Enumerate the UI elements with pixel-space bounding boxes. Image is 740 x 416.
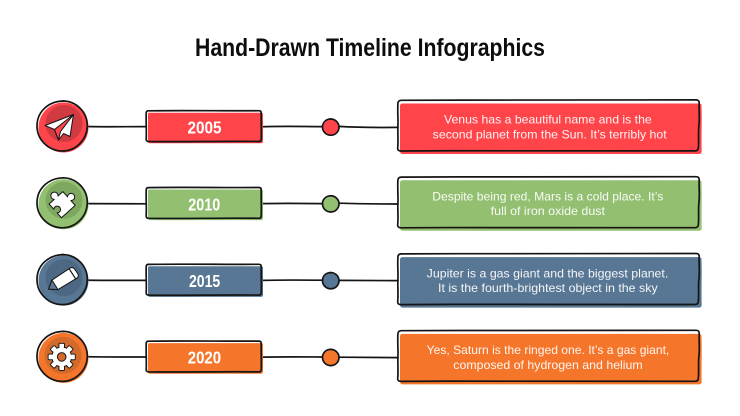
connector lines: [87, 356, 398, 359]
description box: Mars: [398, 177, 702, 231]
description text: Despite being red, Mars is a cold place. It’s: [432, 190, 663, 204]
icon: puzzle piece: [37, 178, 88, 229]
connector lines: [87, 202, 398, 205]
milestone dot: [322, 349, 339, 366]
description text: Venus has a beautiful name and is the: [444, 112, 652, 126]
year box: 2005: 2005: [188, 118, 222, 138]
description text: It is the fourth-brightest object in the sky: [438, 281, 658, 295]
timeline row: 2005: [37, 100, 702, 154]
milestone dot: [322, 196, 339, 213]
year box: 2015: [146, 264, 263, 297]
description text: [433, 112, 667, 141]
milestone dot: [322, 119, 339, 136]
timeline row: 2010: [37, 177, 702, 231]
connector lines: [87, 279, 398, 282]
year box: 2010: 2010: [188, 194, 221, 214]
description text: Jupiter is a gas giant and the biggest planet.: [427, 266, 668, 280]
description text: [427, 266, 668, 295]
description text: [427, 343, 669, 372]
timeline row: 2020: [37, 330, 702, 384]
connector lines: [87, 126, 398, 127]
title: Hand-Drawn Timeline Infographics: [195, 34, 545, 62]
milestone dot: [322, 273, 339, 289]
icon: pencil: [37, 255, 88, 306]
year box: 2020: 2020: [188, 348, 221, 368]
description text: Yes, Saturn is the ringed one. It’s a gas giant,: [427, 343, 669, 357]
year box: 2010: [146, 187, 263, 220]
description text: [432, 190, 663, 218]
year box: 2005: [146, 111, 263, 143]
description text: composed of hydrogen and helium: [453, 358, 643, 372]
description text: second planet from the Sun. It’s terribly hot: [433, 127, 667, 141]
description box: Venus: [398, 100, 702, 154]
year box: 2020: [146, 341, 263, 374]
icon: gear: [37, 331, 88, 383]
description text: full of iron oxide dust: [491, 204, 606, 218]
description box: Saturn: [398, 330, 702, 384]
icon: paper plane: [37, 101, 88, 152]
timeline row: 2015: [37, 254, 702, 308]
year box: 2015: 2015: [189, 271, 220, 291]
description box: Jupiter: [398, 254, 702, 308]
